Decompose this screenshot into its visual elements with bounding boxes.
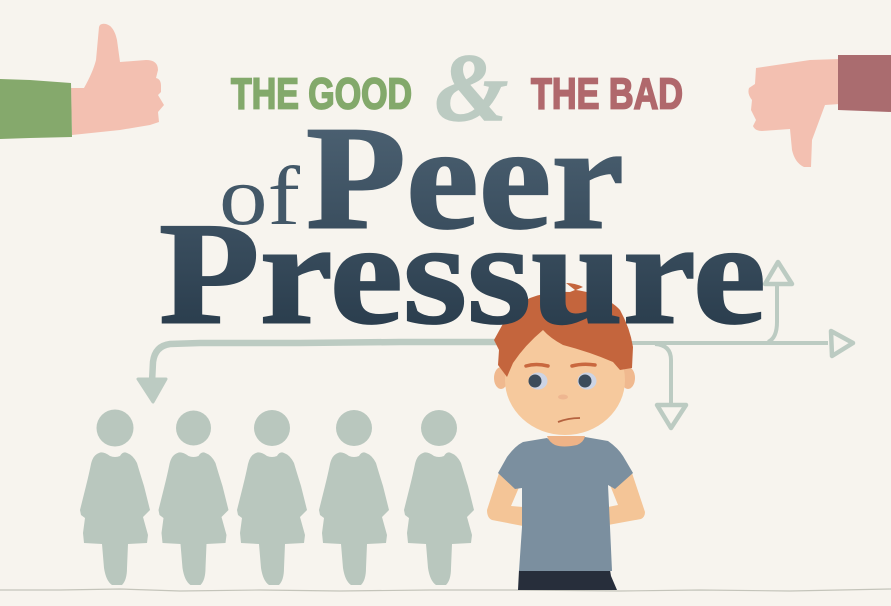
arrow: left to crowd: [138, 342, 505, 402]
hair: [494, 283, 633, 377]
ground line: [0, 589, 891, 591]
hand: thumbs down: [748, 59, 840, 167]
ears: [494, 367, 635, 389]
neck: [547, 436, 585, 446]
sleeve: red: [838, 55, 891, 112]
figure 3: [237, 410, 307, 585]
sleeve: green: [0, 79, 72, 139]
figure 5: [404, 410, 474, 585]
nose: [558, 394, 568, 400]
mouth: [558, 418, 580, 422]
figure 1: [80, 410, 150, 585]
title: peer: Peer: [306, 96, 624, 260]
arrow: down: [655, 344, 686, 428]
title: pressure: Pressure: [159, 192, 766, 354]
figure 4: [319, 410, 389, 585]
thumbs up hand: [0, 24, 164, 139]
left eye: [528, 372, 548, 390]
eyebrows: [526, 364, 595, 366]
arrows of peer influence: [138, 262, 853, 428]
hand: thumbs up: [71, 24, 164, 135]
right eye: [578, 372, 596, 390]
shirt: [498, 437, 633, 571]
crowd of five figures: [80, 410, 474, 585]
ampersand: &: [435, 34, 508, 141]
figure 2: [158, 410, 228, 585]
subtitle: the good: THE GOOD: [231, 70, 412, 118]
subtitle: the bad: THE BAD: [531, 70, 683, 118]
title: of: of: [219, 150, 300, 243]
boy character: [487, 283, 645, 590]
arrow: right: [630, 331, 853, 356]
head: [505, 325, 625, 435]
thumbs down hand: [748, 55, 891, 167]
trousers: [518, 570, 617, 590]
arrow: up: [765, 262, 792, 342]
arms: [487, 470, 645, 526]
